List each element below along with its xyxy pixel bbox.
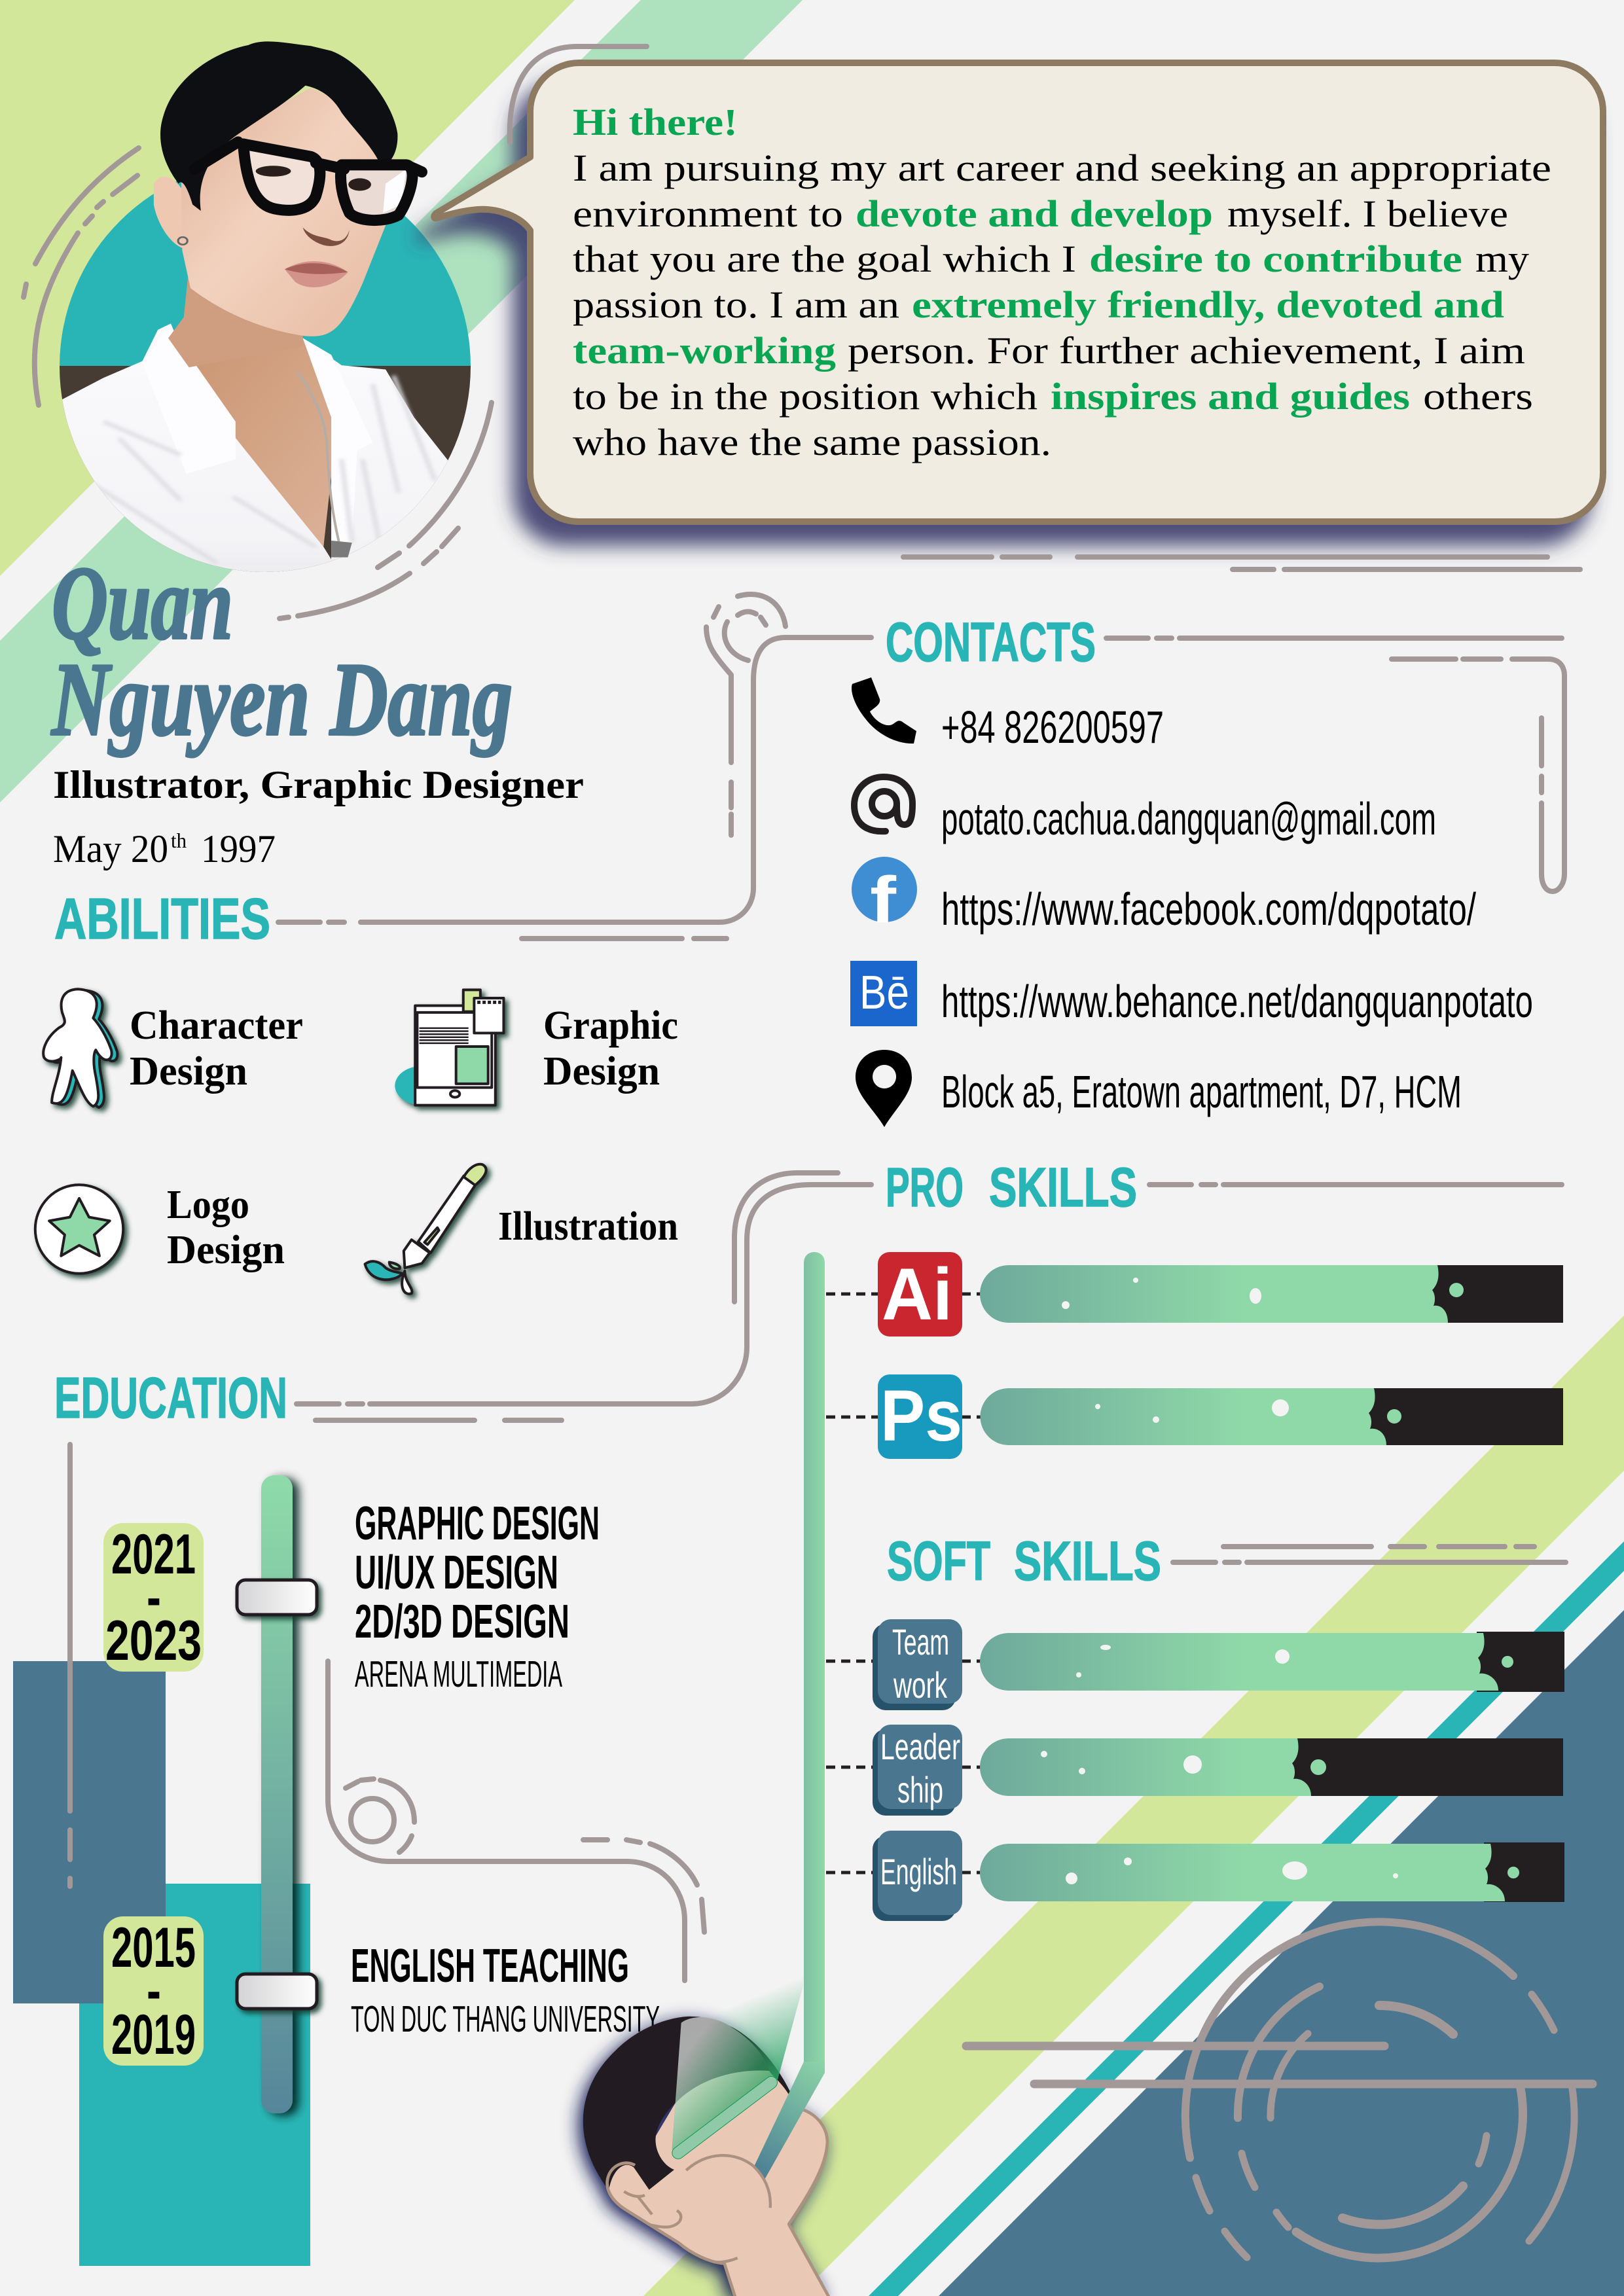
icon: facebook: [852, 857, 917, 937]
glasses: [194, 142, 422, 221]
nose: [303, 228, 350, 246]
birth date: May 20: [53, 827, 168, 870]
abilities connector line: [278, 594, 871, 939]
soft skills heading: SKILLS: [1014, 1530, 1161, 1592]
education entry 1: GRAPHIC DESIGN: [355, 1498, 600, 1550]
education entry 1: 2D/3D DESIGN: [355, 1596, 569, 1648]
bubble text: environment to: [573, 192, 843, 235]
photo portrait: [60, 41, 471, 572]
bubble text: extremely friendly, devoted and: [912, 283, 1504, 326]
label: logo design: [167, 1183, 285, 1272]
year badge 2021-2023: 2023: [105, 1609, 202, 1672]
icon: character design: [43, 989, 117, 1107]
skill bar: Illustrator: [980, 1265, 1563, 1323]
education entry 2: ENGLISH TEACHING: [351, 1940, 629, 1992]
name: Nguyen Dang: [50, 641, 513, 757]
birth date: th: [171, 829, 187, 852]
face: [181, 88, 401, 336]
bubble text: [573, 101, 1551, 463]
abilities heading: ABILITIES: [54, 886, 270, 951]
icon: Illustrator: Ai: [882, 1253, 952, 1335]
head and arm: [607, 2068, 829, 2296]
illustration: hand and headset overlay: [624, 1972, 804, 2262]
slider handle 2015: [237, 1974, 317, 2009]
year badge 2015-2019: 2019: [111, 2003, 196, 2066]
bubble text: inspires and guides: [1051, 375, 1410, 418]
soft skills heading: SOFT: [887, 1530, 990, 1592]
label: graphic design: [543, 1003, 678, 1094]
education connector line: [297, 1173, 1562, 1420]
ear: [154, 177, 190, 249]
lips: [285, 261, 348, 287]
label: character design: Character: [130, 1003, 303, 1048]
badge: english: [873, 1831, 962, 1921]
badge: leadership: ship: [897, 1769, 943, 1810]
bubble text: myself. I believe: [1227, 192, 1508, 235]
education entry 2: [351, 1940, 660, 2040]
bubble text: person. For further achievement, I aim: [848, 329, 1525, 372]
label: character design: [130, 1003, 303, 1094]
bottom right target rings: [966, 1922, 1593, 2258]
icon: logo design: [35, 1185, 123, 1274]
bubble text: passion to. I am an: [573, 283, 899, 326]
icon: facebook: f: [870, 863, 897, 937]
year badge 2021-2023: [103, 1523, 204, 1672]
birth date: [53, 827, 276, 870]
education timeline slider: [237, 1475, 317, 2113]
education left line: [67, 1444, 73, 1886]
skill bar: Photoshop: [980, 1388, 1563, 1445]
contacts lines: [1106, 638, 1564, 891]
year badge 2015-2019: 2015: [111, 1916, 196, 1979]
slider handle 2021: [237, 1580, 317, 1615]
name: [50, 545, 513, 757]
badge: english: English: [880, 1851, 957, 1892]
education entry 2: TON DUC THANG UNIVERSITY: [351, 1998, 660, 2040]
headset light cone: [672, 1972, 804, 2149]
bubble text: team-working: [573, 329, 836, 372]
decorative line group: photo arcs: [24, 46, 1580, 619]
stripes: top left: [0, 0, 803, 802]
hair: [160, 41, 397, 211]
birth date: 1997: [201, 827, 276, 870]
bubble text: I am pursuing my art career and seeking an appropriate: [573, 147, 1551, 189]
soft skills lines: [1173, 1547, 1566, 1562]
badge: team work: work: [893, 1664, 948, 1706]
label: logo design: Logo: [167, 1183, 249, 1227]
year badge 2015-2019: -: [147, 1960, 161, 2022]
label: graphic design: Graphic: [543, 1003, 678, 1048]
badge: team work: [873, 1619, 962, 1710]
education entry 1: [355, 1498, 600, 1695]
job title: Illustrator, Graphic Designer: [53, 763, 584, 806]
contact details: [941, 702, 1533, 1117]
headset glass strip: [678, 2083, 771, 2153]
neck: [168, 267, 363, 367]
hair: [583, 2017, 791, 2191]
education entry 1: ARENA MULTIMEDIA: [355, 1653, 562, 1695]
bubble text: others: [1423, 375, 1533, 418]
year badge 2021-2023: -: [147, 1566, 161, 1629]
eyes and lenses: [244, 144, 412, 221]
icon: map pin: [856, 1050, 912, 1127]
icon: phone: [852, 677, 916, 744]
bubble text: devote and develop: [856, 192, 1213, 235]
icon: Photoshop: Ps: [880, 1376, 962, 1456]
vertical skills bar: [804, 1252, 825, 2073]
education heading: EDUCATION: [54, 1365, 287, 1430]
bubble text: that you are the goal which I: [573, 238, 1076, 280]
contacts heading: CONTACTS: [886, 611, 1096, 673]
necklace: [298, 372, 339, 543]
connector bar diagonal: [754, 2062, 825, 2179]
soft skills heading: [887, 1530, 1161, 1592]
pro skills heading: [886, 1157, 1137, 1218]
stripes: bottom right: [643, 1316, 1624, 2296]
pro skills heading: SKILLS: [989, 1157, 1137, 1218]
education curved connector: [328, 1661, 704, 1981]
label: character design: Design: [130, 1049, 247, 1094]
icon: illustration brush: [365, 1164, 486, 1294]
icon: at sign: [854, 777, 912, 831]
badge: team work: Team: [892, 1621, 949, 1662]
skill bar: team work: [980, 1632, 1564, 1692]
earring: [178, 237, 187, 245]
year badge 2015-2019: [103, 1916, 204, 2066]
bubble text: Hi there!: [573, 101, 738, 143]
dashed connectors: [826, 1294, 981, 1873]
year badge 2021-2023: 2021: [111, 1523, 196, 1586]
pro skills heading: PRO: [886, 1157, 964, 1218]
icon: behance: Bē: [859, 967, 909, 1019]
bubble text: to be in the position which: [573, 375, 1038, 418]
teal photo background: [60, 181, 471, 367]
outline strokes: [607, 2109, 829, 2296]
badge: leadership: [873, 1725, 962, 1816]
bubble text: my: [1475, 238, 1529, 280]
skill bar: english: [980, 1842, 1564, 1902]
icon: graphic design: [395, 990, 503, 1105]
contact details: +84 826200597: [941, 702, 1164, 753]
bubble text: desire to contribute: [1089, 238, 1462, 280]
speech bubble: [434, 63, 1603, 522]
badge: leadership: Leader: [880, 1726, 960, 1767]
label: logo design: Design: [167, 1228, 285, 1272]
education colour blocks: [13, 1661, 310, 2266]
skill bar: leadership: [980, 1738, 1563, 1796]
name: Quan: [52, 545, 233, 661]
label: illustration: Illustration: [498, 1204, 678, 1249]
icon: behance: [850, 961, 917, 1026]
label: graphic design: Design: [543, 1049, 660, 1094]
education entry 1: UI/UX DESIGN: [355, 1547, 558, 1599]
bubble text: who have the same passion.: [573, 421, 1051, 463]
illustration: person with VR headset: [583, 2017, 829, 2296]
